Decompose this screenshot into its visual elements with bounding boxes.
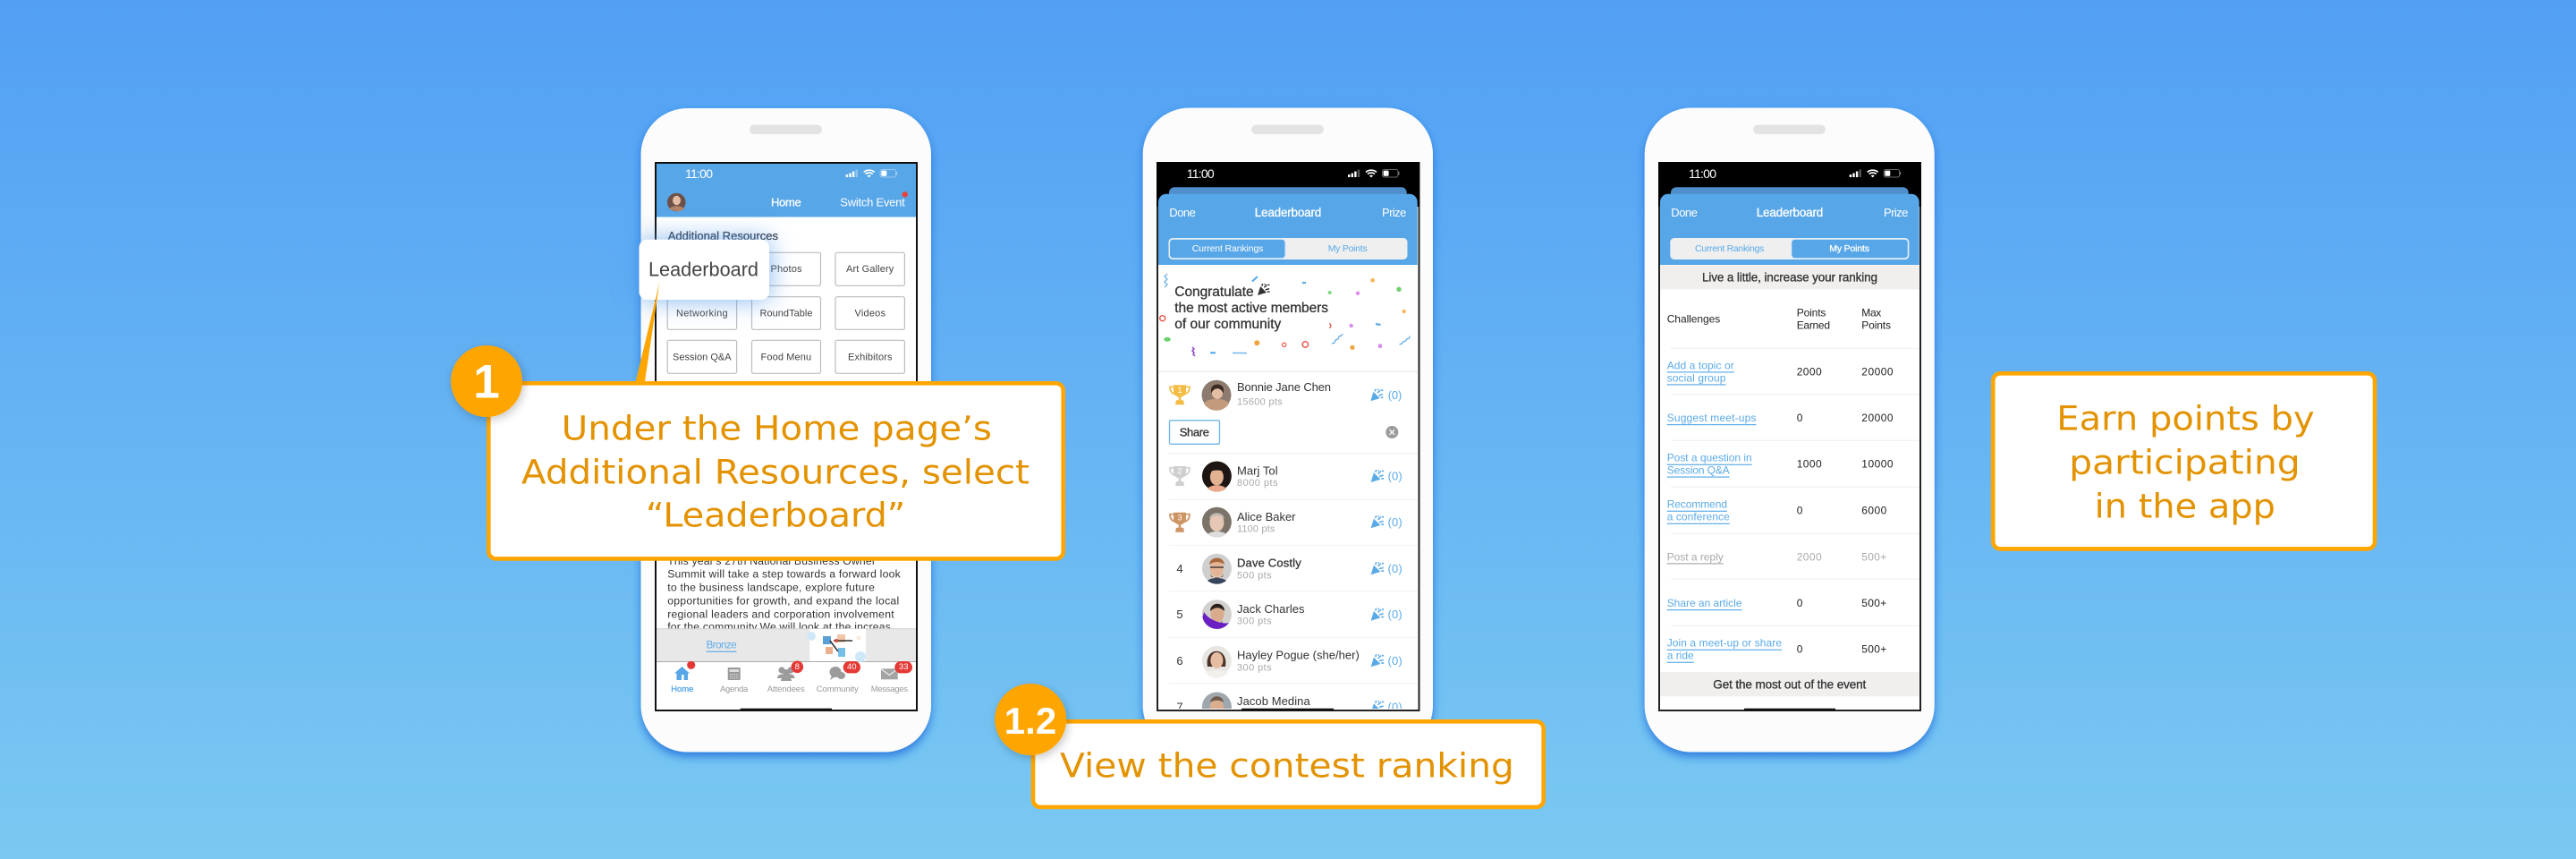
- top band: [1660, 265, 1919, 289]
- challenges table header: Points: [1861, 319, 1891, 332]
- row: share an article: 500+: [1861, 597, 1886, 609]
- phone 3 status bar: 11:00: [1689, 166, 1716, 181]
- bottom tab bar: [671, 660, 912, 711]
- ranking row 4: Dave Costly: 4: [1176, 562, 1183, 575]
- phone 3 modal header: [1660, 194, 1919, 265]
- row: add a topic: [1667, 359, 1894, 384]
- row: add a topic: 2000: [1797, 365, 1822, 378]
- phone 2 status bar: 11:00: [1187, 166, 1215, 181]
- callout 1: select leaderboard: [488, 383, 1063, 558]
- row: join a meet-up: 0: [1797, 643, 1803, 656]
- tab labels: Messages: [871, 685, 908, 694]
- tab labels: [671, 685, 908, 694]
- phone 2 modal header: Done: [1169, 206, 1196, 219]
- row: post a question: Post a question in: [1667, 452, 1752, 464]
- phone 2 screen: [1157, 162, 1419, 721]
- event description text: for the community.We will look at the increas: [667, 621, 891, 634]
- row: post a reply: 500+: [1861, 550, 1886, 563]
- tab badges: 33: [899, 662, 908, 672]
- sponsor banner: [657, 629, 916, 662]
- resource button labels: Networking: [676, 308, 728, 319]
- tab badges: 8: [795, 662, 800, 672]
- step badge 1: [451, 345, 522, 417]
- phone 1 app header: Switch Event: [840, 195, 905, 209]
- challenges table header: Max: [1861, 307, 1881, 319]
- tab icon: community: [830, 667, 845, 680]
- sponsor banner: Bronze: [707, 641, 737, 651]
- ranking row 4: Dave Costly: Dave Costly: [1237, 557, 1301, 569]
- event description text: regional leaders and corporation involvement: [667, 608, 894, 621]
- step badge 1.2: [995, 684, 1066, 755]
- challenges table header: Earned: [1797, 319, 1830, 332]
- ranking row 2: Marj Tol: Marj Tol: [1237, 464, 1278, 478]
- ranking row 6: Hayley Pogue: [1169, 646, 1418, 684]
- share button row: [1169, 421, 1418, 454]
- ranking row 3: Alice Baker: 3: [1177, 514, 1182, 523]
- resource button labels: Videos: [855, 308, 886, 319]
- phone 1 app header: 11:00: [685, 166, 713, 181]
- row: recommend a conference: 6000: [1861, 505, 1887, 517]
- ranking row 7: Jacob Medina: Jacob Medina: [1237, 694, 1310, 708]
- callout: earn points: [1993, 373, 2375, 549]
- arrow: leader line from chip to callout: [635, 283, 659, 383]
- tab badges: [791, 660, 912, 673]
- ranking row 4: Dave Costly: 500 pts: [1237, 570, 1272, 581]
- challenges table header: Points: [1797, 307, 1826, 319]
- congratulations confetti banner: the most active members: [1174, 301, 1328, 316]
- event description text: opportunities for growth, and expand the local: [667, 595, 899, 608]
- ranking row 3: Alice Baker: [1169, 507, 1418, 545]
- row: join a meet-up: 500+: [1861, 643, 1886, 656]
- bottom band: Get the most out of the event: [1713, 678, 1867, 691]
- row: join a meet-up: [1667, 637, 1886, 662]
- ranking row 7: Jacob Medina: (0): [1388, 700, 1402, 714]
- row: add a topic: social group: [1667, 371, 1726, 384]
- row: post a reply: 2000: [1797, 550, 1822, 563]
- row: share an article: [1667, 597, 1886, 609]
- callout: earn points: Earn points by: [2056, 399, 2315, 438]
- resource button labels: Food Menu: [760, 352, 811, 362]
- table divider lines: [1671, 348, 1919, 625]
- ranking row 5: Jack Charles: Jack Charles: [1237, 602, 1305, 616]
- callout 1.2: view the contest ranking: [1033, 721, 1544, 807]
- phone 3 modal header: Prize: [1884, 206, 1908, 219]
- congratulations confetti banner: Congratulate: [1174, 285, 1254, 300]
- tab labels: Community: [817, 685, 859, 694]
- ranking row 7: Jacob Medina: 7: [1176, 700, 1183, 714]
- confetti: [1160, 274, 1410, 356]
- row: suggest meet-ups: 20000: [1861, 412, 1894, 424]
- ranking row 3: Alice Baker: Alice Baker: [1237, 510, 1296, 523]
- resource button labels: Art Gallery: [846, 264, 894, 275]
- ranking row 1: Bonnie Jane Chen: (0): [1388, 388, 1402, 402]
- ranking row 5: Jack Charles: [1169, 600, 1418, 637]
- phone 1 speaker: [750, 125, 822, 134]
- tab icon: attendees: [777, 667, 794, 681]
- row: join a meet-up: Join a meet-up or share: [1667, 637, 1782, 650]
- phone 1: home screen: [640, 108, 931, 752]
- row: share an article: 0: [1797, 597, 1803, 609]
- phone 3: my points: [1645, 107, 1935, 752]
- ranking row 3: Alice Baker: 1100 pts: [1237, 524, 1275, 535]
- resource button labels: Session Q&A: [673, 352, 732, 362]
- callout 1: select leaderboard: Additional Resources, select: [521, 454, 1030, 492]
- resource buttons grid: [667, 252, 904, 373]
- row: recommend a conference: [1667, 498, 1887, 523]
- ranking row 4: Dave Costly: [1169, 554, 1418, 591]
- phone 3 modal header: Leaderboard: [1757, 206, 1823, 219]
- phone 1 screen: [656, 163, 917, 711]
- phone 2 modal header: Leaderboard: [1255, 206, 1321, 219]
- phone 2 modal header: [1158, 194, 1418, 265]
- row: suggest meet-ups: 0: [1797, 412, 1803, 424]
- row: suggest meet-ups: Suggest meet-ups: [1667, 412, 1756, 424]
- row: recommend a conference: 0: [1797, 505, 1803, 517]
- share button row: Share: [1180, 426, 1209, 438]
- challenges table header: [1667, 307, 1891, 332]
- ranking row 1: Bonnie Jane Chen: [1170, 380, 1402, 411]
- ranking row 6: Hayley Pogue: Hayley Pogue (she/her): [1237, 648, 1360, 662]
- ranking row 1: Bonnie Jane Chen: 1: [1177, 386, 1182, 395]
- callout: earn points: participating: [2069, 443, 2301, 481]
- tab icon: agenda: [728, 668, 741, 680]
- row: post a question: Session Q&A: [1667, 464, 1730, 476]
- leaderboard chip callout: [639, 240, 769, 300]
- ranking row 5: Jack Charles: (0): [1388, 608, 1402, 621]
- step badge 1: 1: [473, 355, 500, 408]
- phone 3 speaker: [1753, 125, 1826, 134]
- tab labels: Home: [671, 685, 693, 694]
- ranking row 2: Marj Tol: [1169, 462, 1418, 499]
- ranking row 6: Hayley Pogue: 300 pts: [1237, 662, 1272, 673]
- leaderboard chip callout: Leaderboard: [648, 258, 758, 280]
- bottom band: [1660, 672, 1919, 696]
- ranking row 6: Hayley Pogue: (0): [1388, 654, 1402, 668]
- event description text: to the business landscape, explore future: [667, 582, 875, 594]
- top band: Live a little, increase your ranking: [1702, 270, 1877, 285]
- tab icon: messages: [881, 668, 898, 679]
- row: join a meet-up: a ride: [1667, 650, 1694, 662]
- ranking row 7: Jacob Medina: [1177, 693, 1402, 709]
- callout 1: select leaderboard: Under the Home page’s: [562, 410, 992, 448]
- resource button labels: [673, 264, 894, 362]
- tab icon: home: [674, 661, 695, 680]
- ranking row 2: Marj Tol: 2: [1177, 467, 1182, 476]
- phone 3 screen: [1658, 162, 1921, 711]
- row: suggest meet-ups: [1667, 412, 1894, 424]
- callout: earn points: in the app: [2095, 487, 2275, 525]
- resource button labels: Photos: [771, 264, 802, 275]
- ranking row 5: Jack Charles: 5: [1176, 608, 1183, 621]
- step badge 1.2: 1.2: [1004, 700, 1056, 742]
- segmented control: current rankings selected: My Points: [1328, 243, 1368, 254]
- event description text: This year's 27th National Business Owner: [667, 555, 876, 567]
- tab labels: Agenda: [720, 685, 749, 694]
- ranking row 4: Dave Costly: (0): [1388, 562, 1402, 575]
- callout 1: select leaderboard: “Leaderboard”: [646, 496, 905, 534]
- congratulations confetti banner: [1158, 274, 1418, 371]
- ranking row 6: Hayley Pogue: 6: [1176, 654, 1183, 668]
- ranking row 3: Alice Baker: (0): [1388, 515, 1402, 529]
- challenges table header: Challenges: [1667, 313, 1720, 326]
- row: post a question: [1667, 452, 1894, 476]
- segmented control: my points selected: Current Rankings: [1695, 243, 1764, 254]
- row: recommend a conference: a conference: [1667, 511, 1730, 523]
- event description text: [667, 560, 901, 628]
- resource button labels: RoundTable: [760, 308, 812, 319]
- segmented control: current rankings selected: [1168, 238, 1408, 259]
- ranking row 5: Jack Charles: 300 pts: [1237, 617, 1272, 627]
- ranking row 1: Bonnie Jane Chen: Bonnie Jane Chen: [1237, 380, 1331, 394]
- phone 3 modal header: Done: [1671, 206, 1698, 219]
- row: post a reply: [1667, 550, 1886, 563]
- segmented control: my points selected: [1670, 238, 1909, 259]
- phone 1 app header: [657, 164, 916, 217]
- segmented control: my points selected: My Points: [1829, 243, 1869, 254]
- tab labels: Attendees: [767, 685, 805, 694]
- phone 2 modal header: Prize: [1382, 206, 1406, 219]
- phone 2 speaker: [1251, 125, 1324, 134]
- ranking row 1: Bonnie Jane Chen: 15600 pts: [1237, 396, 1283, 407]
- row: post a question: 1000: [1797, 458, 1822, 471]
- ranking row 2: Marj Tol: (0): [1388, 469, 1402, 483]
- phone 2: leaderboard rankings: [1143, 107, 1433, 752]
- callout 1.2: view the contest ranking: View the contest ranking: [1060, 746, 1514, 785]
- phone 2 status bar: [1157, 162, 1419, 207]
- phone 1 app header: Home: [771, 195, 801, 209]
- row: recommend a conference: Recommend: [1667, 498, 1727, 511]
- row: add a topic: 20000: [1861, 365, 1894, 378]
- row: add a topic: Add a topic or: [1667, 359, 1734, 371]
- phone 3 status bar: [1658, 162, 1921, 207]
- ranking rows 2 to 7: [1169, 462, 1418, 721]
- row: post a question: 10000: [1861, 458, 1894, 471]
- row: share an article: Share an article: [1667, 597, 1742, 609]
- row: post a reply: Post a reply: [1667, 550, 1724, 563]
- ranking row 2: Marj Tol: 8000 pts: [1237, 478, 1278, 489]
- resource button labels: Exhibitors: [848, 352, 893, 362]
- congratulations confetti banner: of our community: [1174, 317, 1282, 332]
- tab badges: 40: [847, 662, 857, 672]
- additional resources heading: Additional Resources: [668, 229, 778, 242]
- event description text: Summit will take a step towards a forward look: [667, 568, 902, 581]
- segmented control: current rankings selected: Current Rankings: [1192, 243, 1263, 254]
